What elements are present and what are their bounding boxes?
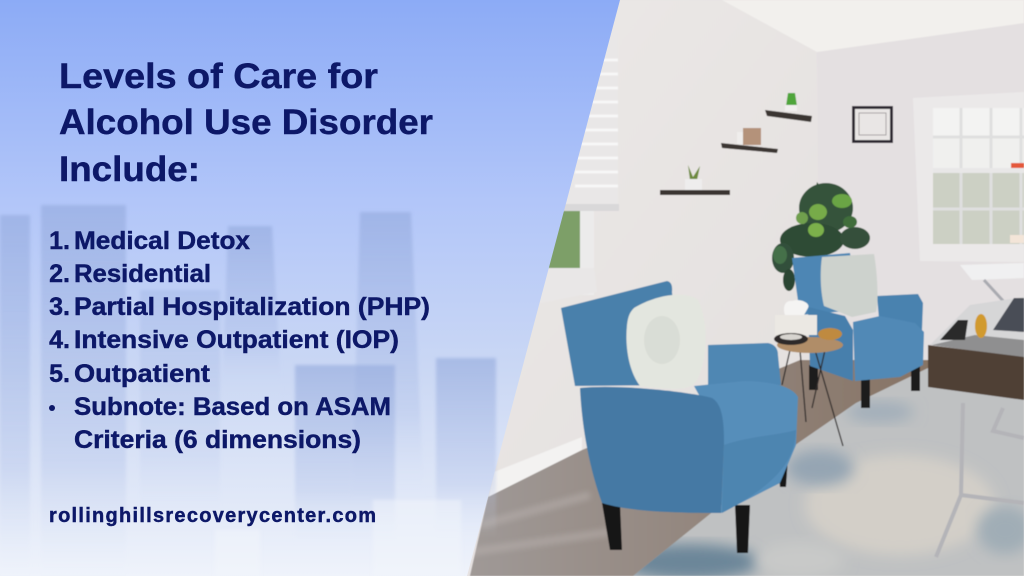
list: levels of care: Outpatient	[74, 360, 211, 388]
left wall	[460, 0, 830, 500]
framed certificate	[852, 106, 893, 143]
skyline silhouette	[0, 205, 496, 576]
back wall	[817, 23, 1024, 370]
list: levels of care: 5.	[49, 360, 70, 388]
area rug	[620, 360, 1024, 576]
panel: blue text background	[0, 0, 620, 576]
list: levels of care: Residential	[74, 260, 211, 288]
second armchair	[792, 253, 924, 408]
website url: rollinghillsrecoverycenter.com	[49, 505, 376, 527]
list: levels of care: 1.	[49, 227, 70, 255]
main armchair	[561, 281, 798, 553]
title: Include:	[59, 150, 200, 189]
list: levels of care: Criteria (6 dimensions)	[74, 426, 361, 454]
side table with tissue box	[774, 300, 843, 446]
right window	[913, 92, 1024, 262]
potted plant	[772, 182, 870, 291]
title	[59, 57, 433, 189]
photo: therapy room interior	[460, 0, 1024, 576]
wood floor	[470, 360, 929, 576]
list: levels of care: 4.	[49, 326, 70, 354]
list: levels of care: 3.	[49, 293, 70, 321]
ceiling	[722, 0, 1024, 52]
title: Alcohol Use Disorder	[59, 103, 433, 142]
list: levels of care: Subnote: Based on ASAM	[74, 393, 391, 421]
list: levels of care: Intensive Outpatient (IOP)	[74, 326, 399, 354]
list: levels of care	[49, 227, 430, 454]
list: levels of care: 2.	[49, 260, 70, 288]
wall shelves with decor	[660, 93, 812, 195]
list: levels of care: Partial Hospitalization (PHP)	[74, 293, 430, 321]
cushion	[626, 295, 706, 389]
left window with blinds	[540, 30, 619, 303]
desk with chrome legs and laptop stand	[928, 263, 1024, 557]
list: levels of care: Medical Detox	[74, 227, 250, 255]
baseboard	[489, 437, 582, 497]
title: Levels of Care for	[59, 57, 378, 96]
